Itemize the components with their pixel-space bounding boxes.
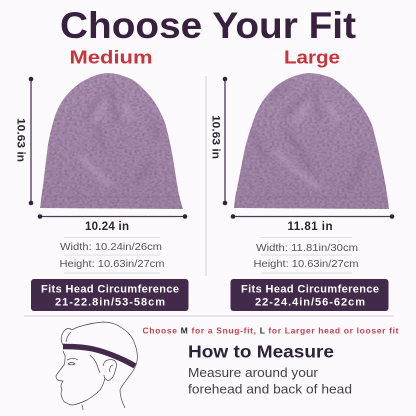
instructions: Measure around your [188,366,318,380]
panel: medium circumference: 21-22.8in/53-58cm [55,296,165,308]
title: Choose Your Fit [60,5,356,46]
label: medium width: 10.24 in [85,221,129,233]
medium width spec: Width: 10.24in/26cm [60,242,162,253]
heading: Large: Large [284,46,340,68]
heading: how to measure: How to Measure [188,342,334,362]
panel: large circumference: 22-24.4in/56-62cm [255,296,365,308]
label: medium height: 10.63 in [14,118,26,162]
medium spec rules [64,238,160,273]
medium height spec: Height: 10.63in/27cm [60,259,164,270]
icon: measuring band [63,346,135,366]
arrow: large height [223,77,227,205]
panel: large circumference [230,279,388,311]
arrow: medium height [29,77,33,205]
heading: Medium: Medium [70,46,152,68]
instructions [188,366,352,396]
large spec rules [261,238,352,273]
panel: large hat [234,73,389,209]
divider rule [24,315,394,317]
large width spec: Width: 11.81in/30cm [256,243,358,254]
icon: head with measuring band [56,322,137,410]
label: large height: 10.63 in [210,115,222,159]
arrow: large width [231,214,394,219]
panel: medium circumference [31,279,188,311]
arrow: medium width [38,214,187,219]
panel: medium hat [40,73,183,209]
label: large width: 11.81 in [288,221,332,233]
large height spec: Height: 10.63in/27cm [254,259,358,270]
fit tip: Choose M for a Snug-fit, L for Larger head or looser fit [142,326,399,336]
instructions: forehead and back of head [188,382,352,396]
panel: medium circumference: Fits Head Circumference [41,284,179,296]
panel: large circumference: Fits Head Circumference [241,284,379,296]
center divider [205,76,207,276]
